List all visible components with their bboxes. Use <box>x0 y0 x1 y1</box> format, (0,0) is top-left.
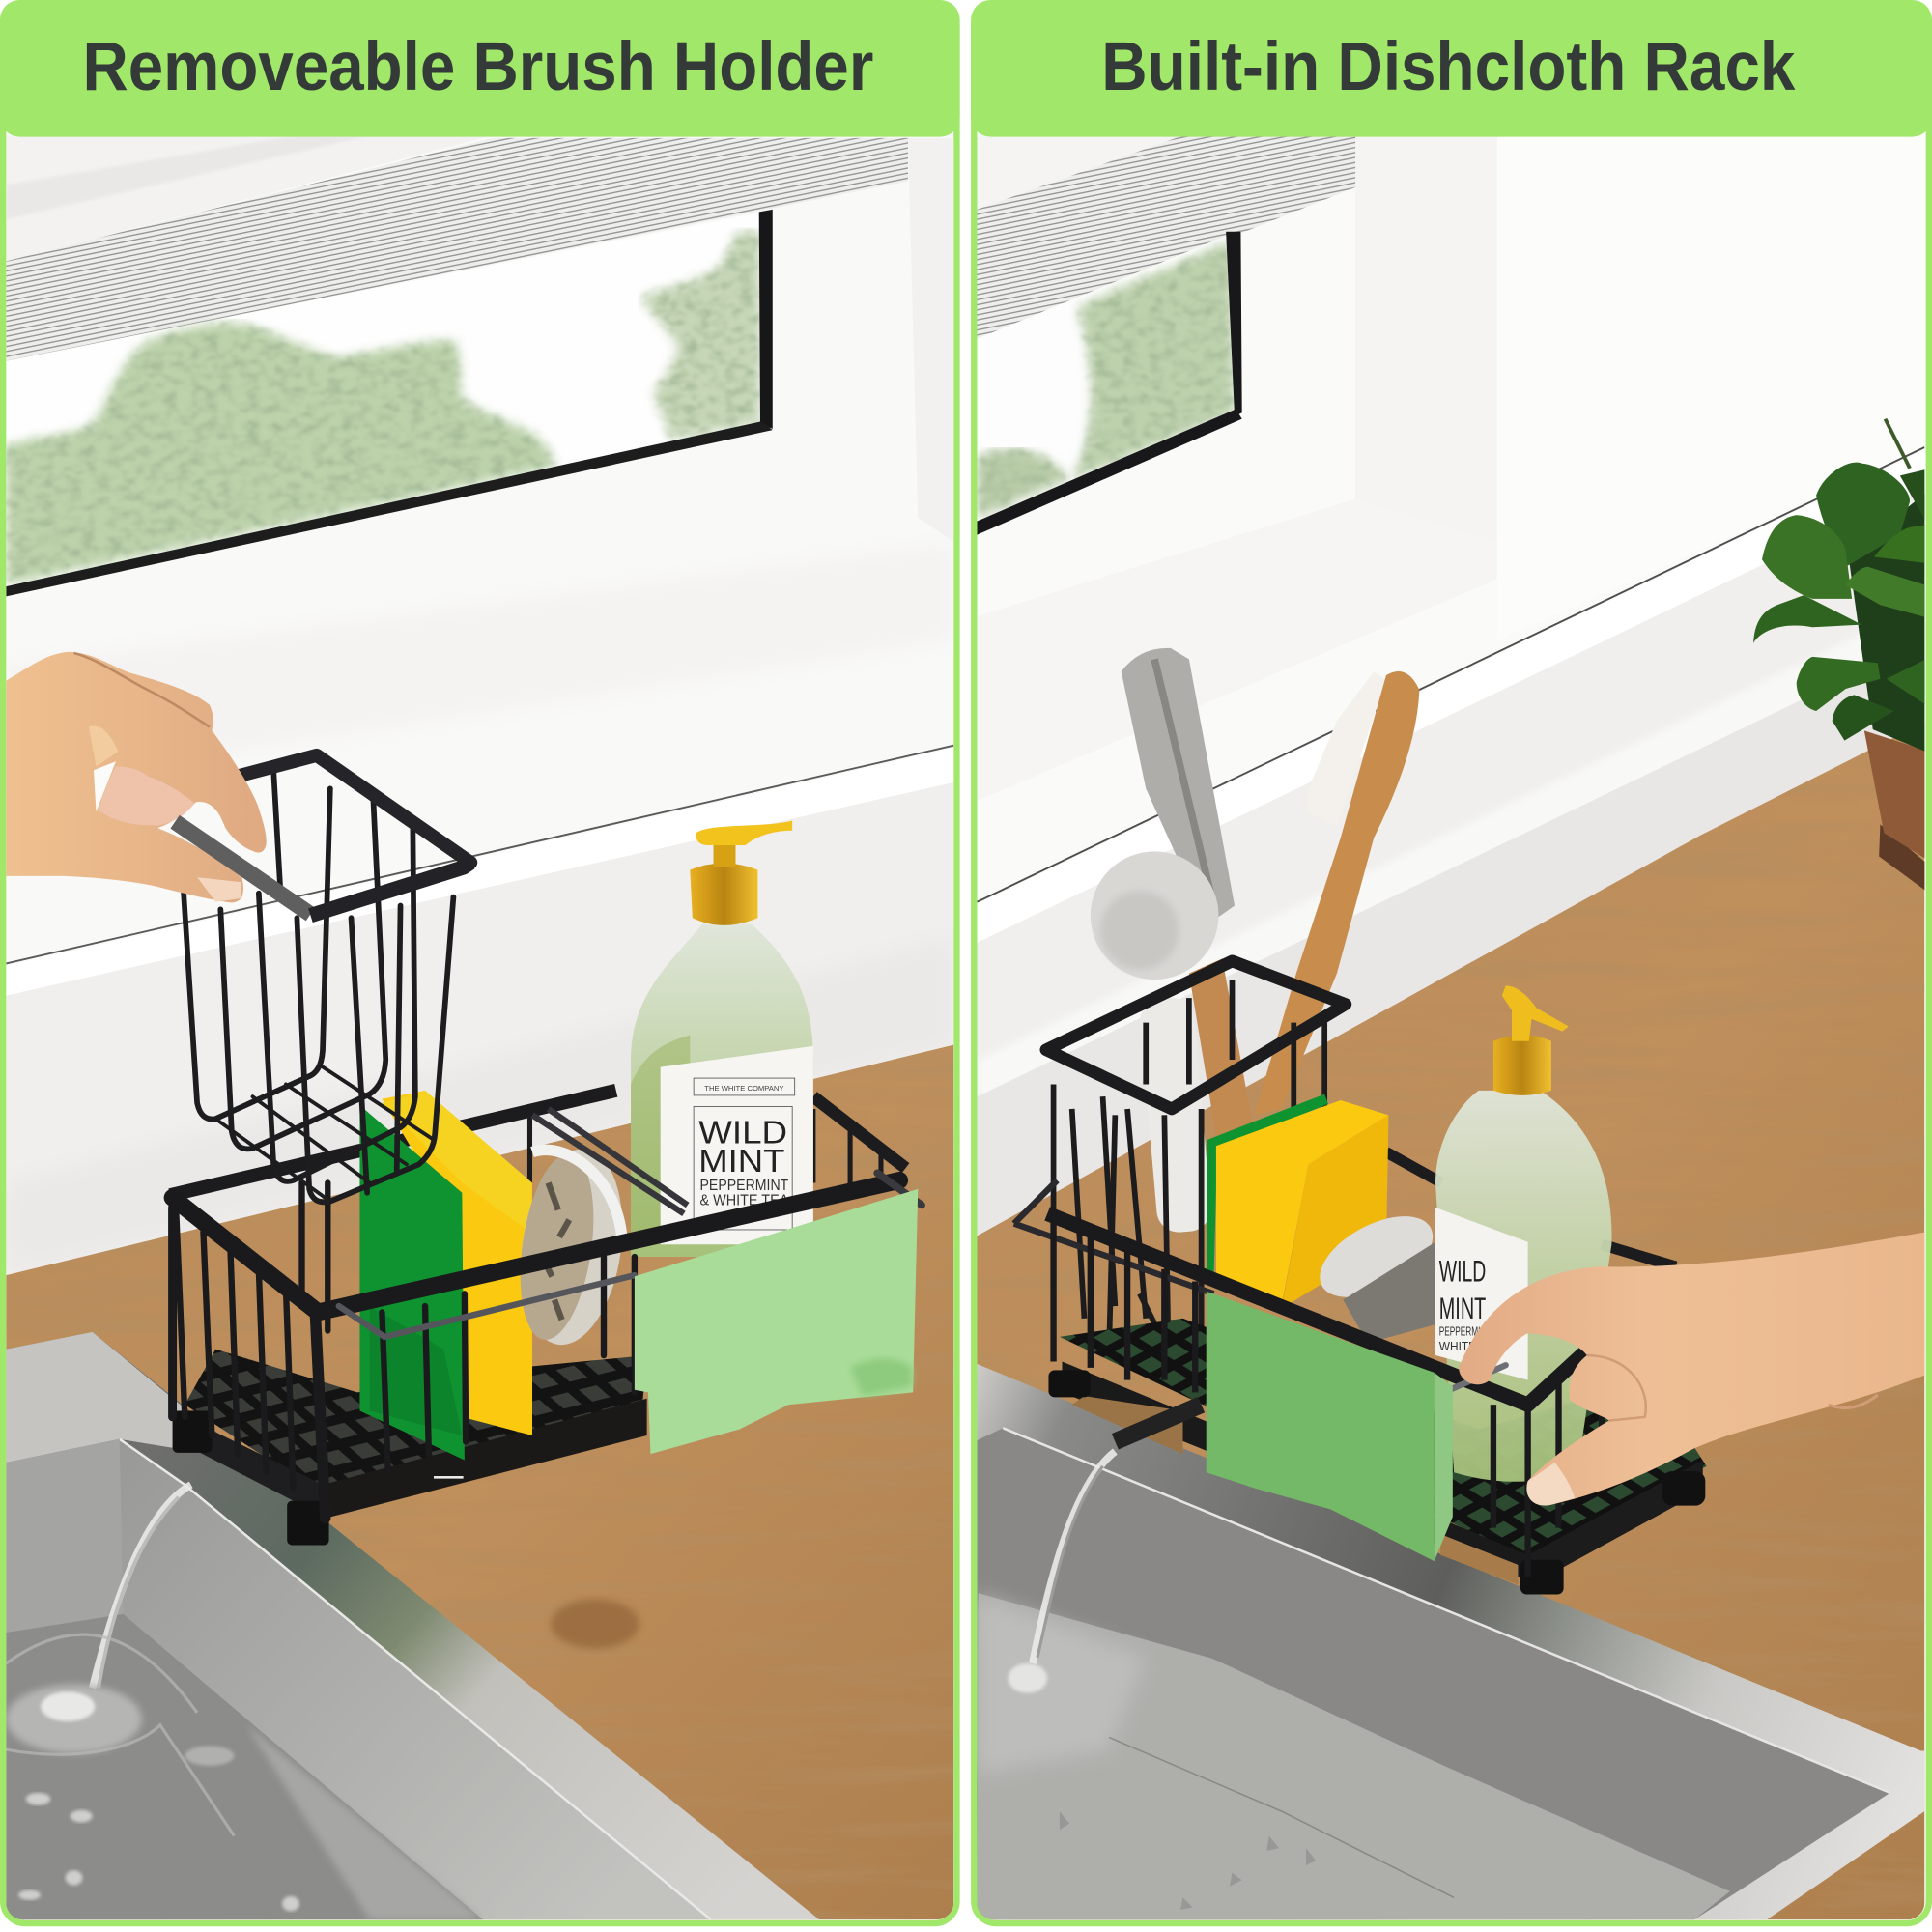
running water <box>6 1485 299 1911</box>
hand holding basket <box>0 652 267 902</box>
photo: kitchen sink with rack being moved <box>977 124 1926 1922</box>
hand holding rack <box>1459 1233 1924 1506</box>
bottle label: WHITE <box>1439 1339 1476 1353</box>
bottle label <box>1435 1208 1528 1380</box>
back rail of rack <box>1386 1152 1676 1266</box>
bottle label: THE WHITE COMPANY <box>704 1084 784 1093</box>
steel sink <box>977 1364 1924 1919</box>
bottle label <box>661 1046 813 1244</box>
brush basket <box>1046 961 1346 1355</box>
rack wires and rim <box>1014 1180 1676 1577</box>
removable brush basket wires <box>184 755 470 1202</box>
bottle label: WILD <box>698 1116 787 1151</box>
wooden counter <box>977 722 1924 1919</box>
rack base tray <box>173 1350 647 1545</box>
bottle label: & WHITE TEA <box>699 1192 789 1208</box>
steel sink <box>6 1332 819 1919</box>
window with trees <box>6 210 773 596</box>
round soap dish <box>1307 1200 1446 1343</box>
brush basket front rim <box>175 822 470 916</box>
rack back wires <box>170 1091 906 1195</box>
dishcloth <box>635 1189 918 1454</box>
bottle label: PEPPERMINT <box>1439 1324 1492 1339</box>
soap bottle <box>631 820 813 1257</box>
wall ledge line <box>6 746 953 963</box>
green and yellow sponge <box>1208 1094 1389 1309</box>
round soap dish <box>520 1144 627 1345</box>
window blind <box>6 135 908 361</box>
bottle label: MINT <box>1439 1291 1486 1325</box>
heading: removeable brush holder: Removeable Brush Holder <box>82 28 873 105</box>
panel: removeable brush holder <box>0 3 956 1923</box>
wall ledge line <box>977 447 1924 902</box>
rack wires and rim <box>173 1173 922 1518</box>
right header banner <box>971 0 1932 137</box>
heading: built-in dishcloth rack: Built-in Dishcloth Rack <box>1101 28 1796 105</box>
photo: kitchen sink with brush holder being lifted <box>0 124 953 1922</box>
window frame side <box>953 139 954 542</box>
wooden counter <box>6 1045 953 1919</box>
soap bottle <box>1435 985 1611 1482</box>
round scrub brush <box>1091 851 1218 980</box>
window blind <box>977 135 1368 339</box>
bottle label: MINT <box>698 1144 784 1179</box>
bottle label: PEPPERMINT <box>699 1178 788 1194</box>
panel: built-in dishcloth rack <box>974 3 1929 1923</box>
bottle label: WILD <box>1439 1254 1486 1289</box>
window frame and wall <box>1355 135 1497 542</box>
rack base tray <box>1048 1319 1707 1595</box>
window with trees <box>977 232 1242 535</box>
dishcloth <box>1207 1292 1453 1561</box>
rack side divider <box>532 1109 688 1213</box>
wooden handled brush <box>1189 671 1419 1158</box>
potted plant <box>1753 419 1926 891</box>
left header banner <box>0 0 960 137</box>
running water <box>1008 1452 1454 1910</box>
gray bottle brush <box>1122 648 1235 1234</box>
green and yellow sponge <box>359 1091 532 1460</box>
